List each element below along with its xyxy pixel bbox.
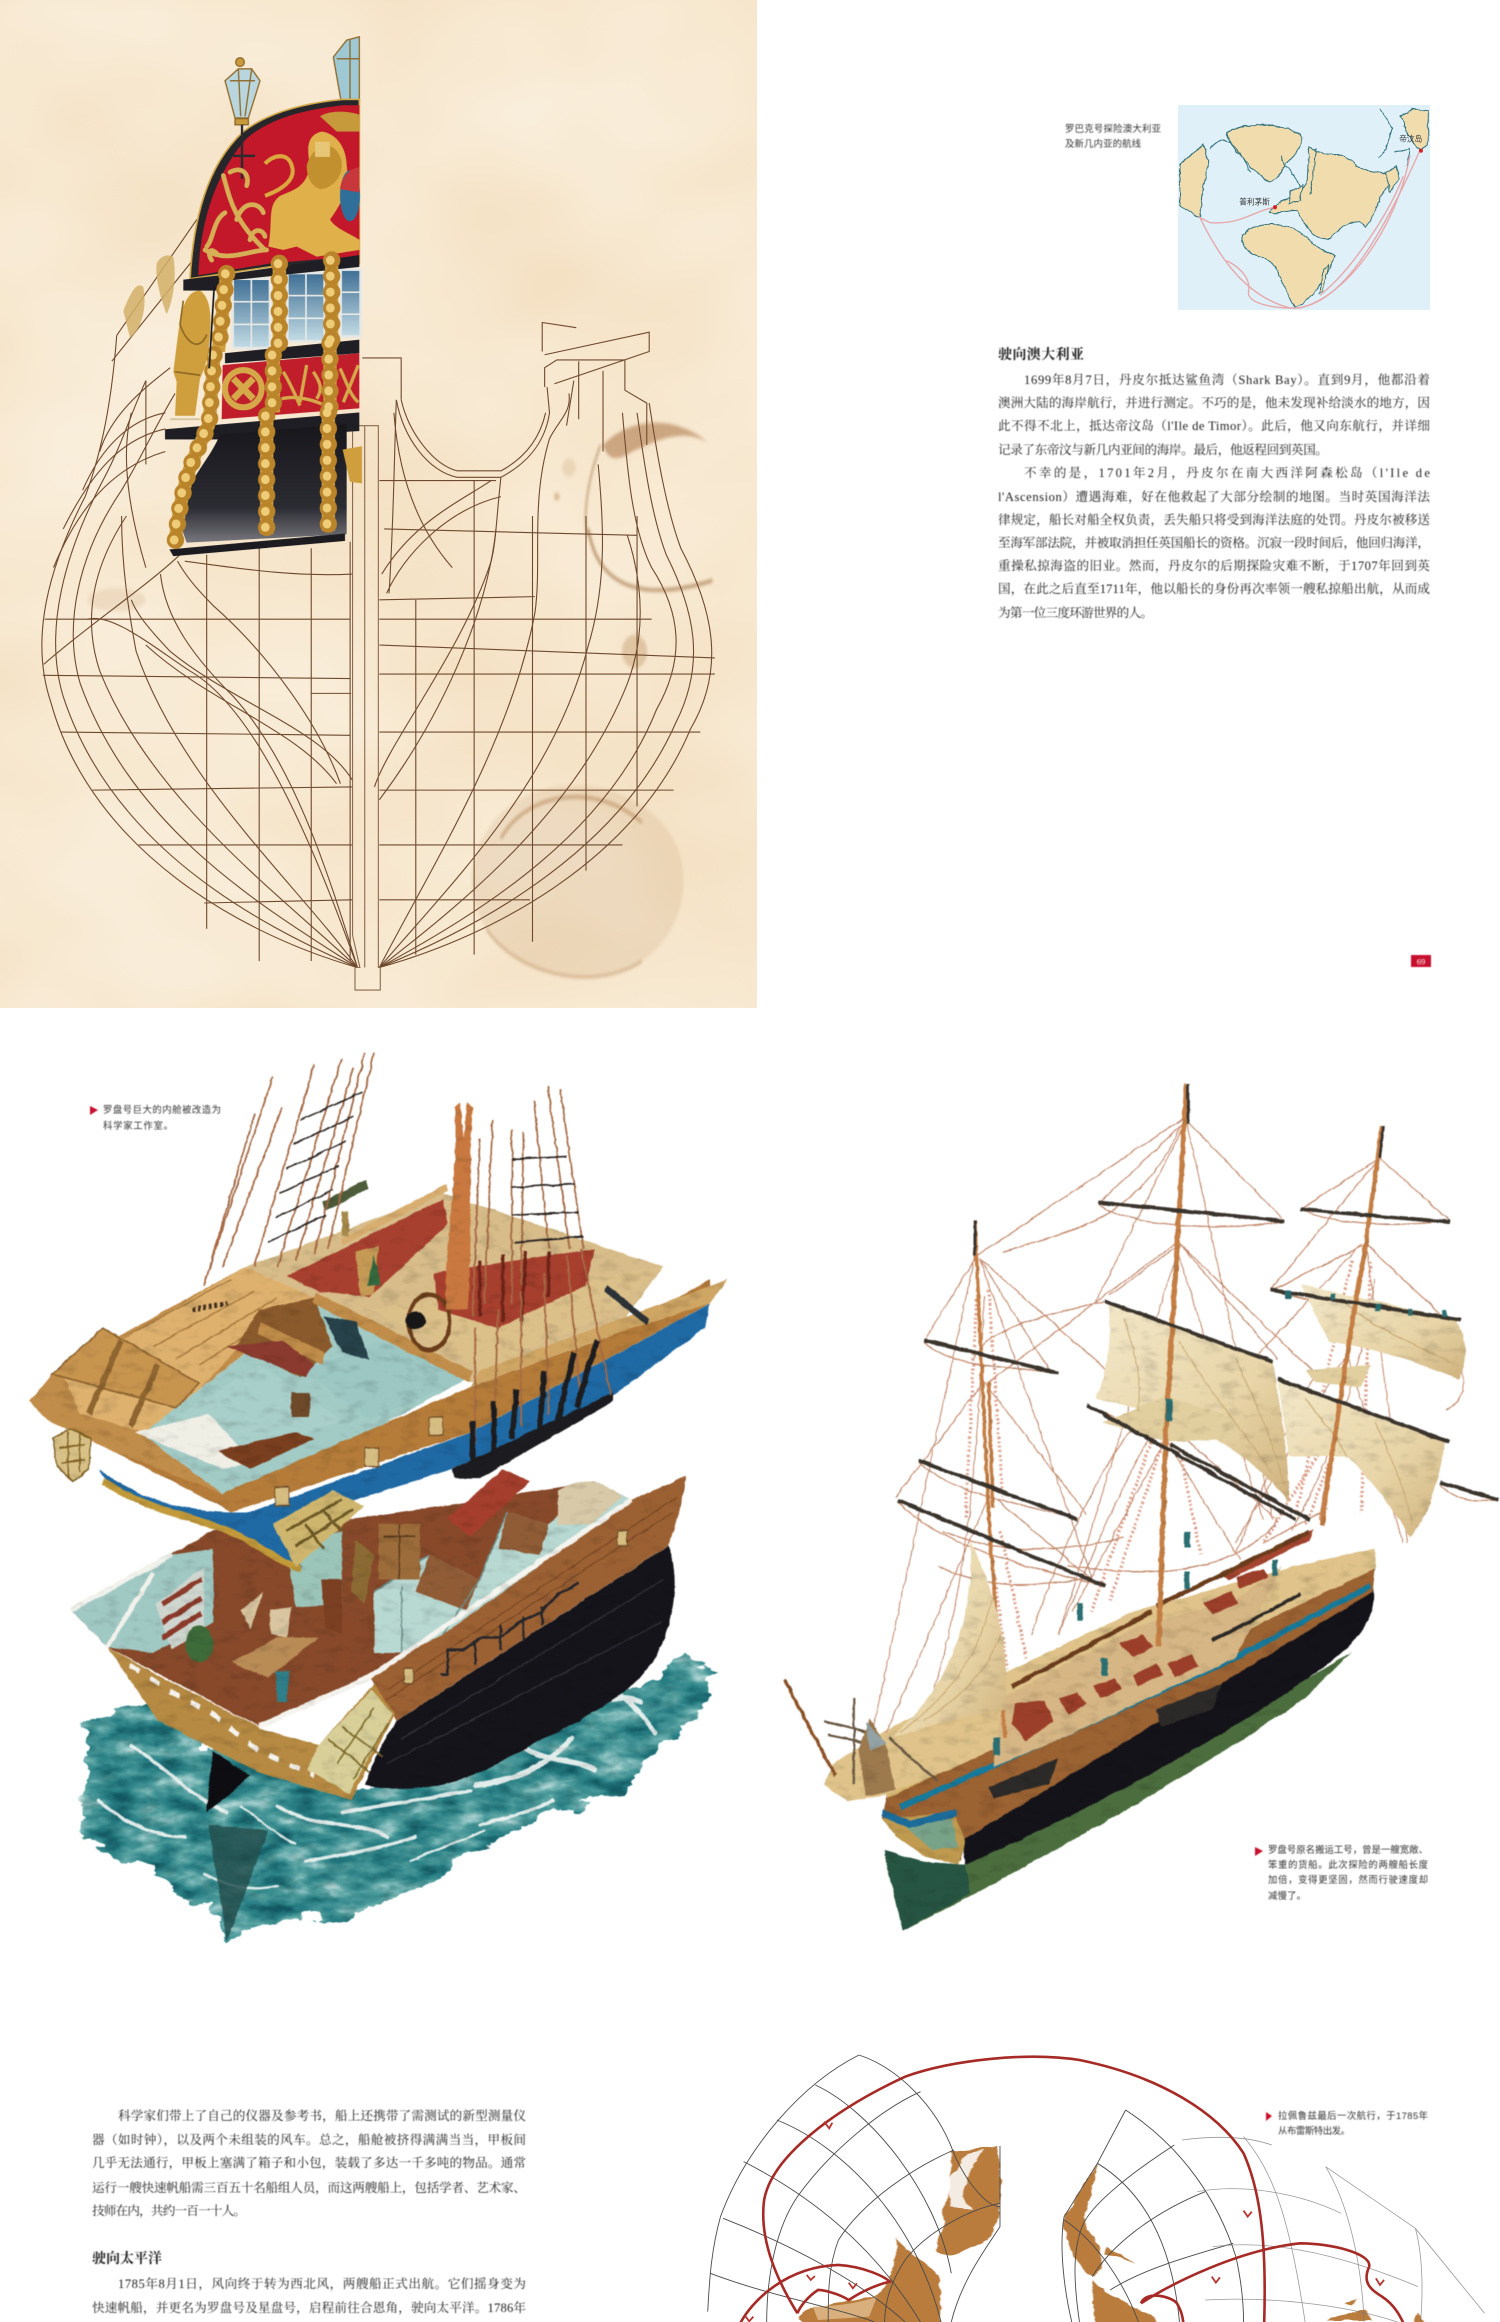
callout: ship note: 罗盘号原名搬运工号，曾是一艘宽敞、	[1268, 1844, 1428, 1855]
masts	[975, 1083, 1382, 1738]
text block: sailing to Australia	[998, 346, 1430, 620]
illustration: full rigged ship	[784, 1083, 1499, 1931]
callout: cabin note	[90, 1104, 221, 1131]
hull timber band	[882, 1569, 1375, 1862]
paragraph: 为第一位三度环游世界的人。	[998, 605, 1153, 620]
mast	[445, 1101, 473, 1310]
paragraph: 至海军部法院，并被取消担任英国船长的资格。沉寂一段时间后，他回归海洋，	[998, 535, 1430, 551]
stern frame and top deck	[29, 1267, 314, 1494]
upper interior base	[140, 1297, 471, 1506]
stern lantern	[52, 1429, 91, 1481]
deck hatches and crates	[1012, 1569, 1268, 1741]
hull wireframe lines	[42, 219, 715, 990]
map: voyage of the Roebuck	[1065, 105, 1430, 310]
lower dark counter	[180, 424, 347, 543]
chainplates	[989, 1684, 1222, 1798]
lower gallery railing	[107, 1647, 395, 1800]
masts over sails	[1159, 1244, 1177, 1646]
map caption: 罗巴克号探险澳大利亚	[1065, 123, 1161, 134]
illustration: cutaway ship in waves	[29, 1052, 728, 1941]
table and figures	[232, 1638, 319, 1678]
paragraph	[92, 2108, 526, 2219]
upper cabins	[172, 1365, 342, 1463]
callout: route note: 从布雷斯特出发。	[1278, 2125, 1350, 2136]
deck cannon	[606, 1288, 648, 1322]
paragraph: 快速帆船，并更名为罗盘号及星盘号，启程前往合恩角，驶向太平洋。1786年	[92, 2300, 526, 2316]
icon: right lantern	[333, 37, 359, 104]
route lines	[738, 2057, 1405, 2322]
paragraph: 1785年8月1日，风向终于转为西北风，两艘船正式出航。它们摇身变为	[118, 2276, 526, 2292]
callout: ship note: 笨重的货船。此次探险的两艘船长度	[1268, 1859, 1428, 1870]
lower interior floor	[71, 1481, 632, 1727]
paragraph: 1699年8月7日，丹皮尔抵达鲨鱼湾（Shark Bay）。直到9月，他都沿着	[1024, 372, 1430, 388]
red hatches	[287, 1199, 448, 1297]
callout: ship note: 加倍，变得更坚固，然而行驶速度却	[1268, 1874, 1428, 1885]
gold pillars	[174, 260, 332, 544]
paragraph: 澳洲大陆的海岸航行，并进行测定。不巧的是，他未发现补给淡水的地方，因	[998, 395, 1430, 411]
lower hull black	[365, 1546, 675, 1789]
lower hull planking	[369, 1475, 687, 1720]
callout: cabin note: 罗盘号巨大的内舱被改造为	[103, 1104, 221, 1115]
paragraph: 此不得不北上，抵达帝汶岛（l'Ile de Timor）。此后，他又向东航行，并详细	[998, 418, 1430, 434]
waves	[84, 1653, 714, 1941]
rudder below water	[209, 1825, 268, 1941]
map caption	[1065, 123, 1161, 149]
carved red frieze	[222, 353, 359, 419]
paragraph: 国，在此之后直至1711年，他以船长的身份再次率领一艘私掠船出航，从而成	[998, 581, 1430, 597]
page number: 69	[1417, 956, 1425, 966]
stern upper red panel	[190, 99, 359, 279]
paragraph: 器（如时钟），以及两个未组装的风车。总之，船舱被挤得满满当当，甲板间	[92, 2132, 526, 2148]
ornament: hanging mask	[343, 446, 362, 483]
lower library room	[71, 1549, 213, 1653]
coffee stains	[88, 423, 712, 977]
lower cabins	[374, 1481, 632, 1653]
black bars	[165, 255, 359, 439]
grid lines	[708, 2055, 1244, 2322]
paragraph: 重操私掠海盗的旧业。然而，丹皮尔的后期探险灾难不断，于1707年回到英	[998, 558, 1430, 574]
landmasses	[797, 2146, 1428, 2322]
paragraph	[998, 372, 1430, 620]
icon: left lantern	[225, 58, 260, 125]
ornament: carved figure	[173, 291, 211, 416]
ornament: royal lion	[265, 112, 360, 257]
windows	[233, 270, 361, 348]
stern painted decoration	[123, 37, 362, 556]
callout: ship note: 减慢了。	[1268, 1890, 1306, 1901]
text block: scientists and the Pacific	[92, 2108, 526, 2316]
heading: 驶向澳大利亚	[998, 346, 1084, 363]
black hull	[961, 1586, 1374, 1865]
yards	[898, 1203, 1499, 1586]
panel: hull construction plan on parchment	[0, 0, 757, 1008]
side ports	[275, 1417, 627, 1684]
map labels	[1239, 134, 1422, 207]
map: La Perouse route	[708, 2055, 1485, 2322]
callout: cabin note: 科学家工作室。	[103, 1120, 173, 1131]
deck	[824, 1548, 1375, 1801]
paragraph: 不幸的是，1701年2月，丹皮尔在南大西洋阿森松岛（l'Ile de	[1024, 465, 1430, 481]
paragraph: 律规定，船长对船全权负责，丢失船只将受到海洋法庭的处罚。丹皮尔被移送	[998, 512, 1430, 528]
bow spar and bowsprit	[784, 1680, 835, 1776]
stern gallery	[882, 1813, 966, 1865]
crew on rigging	[993, 1290, 1447, 1755]
paragraph: 技师在内，共约一百一十人。	[92, 2203, 246, 2219]
sails	[891, 1540, 1007, 1738]
ornament: gold foliage	[205, 170, 267, 260]
callout: route note	[1266, 2110, 1428, 2136]
paragraph: 记录了东帝汶与新几内亚间的海岸。最后，他返程回到英国。	[998, 442, 1328, 458]
upper lattice window	[273, 1491, 365, 1567]
deadeyes	[473, 1340, 597, 1463]
map labels: 普利茅斯	[1239, 196, 1270, 207]
paragraph: 几乎无法通行，甲板上塞满了箱子和小包，装载了多达一千多吨的物品。通常	[92, 2155, 526, 2171]
wheel	[409, 1294, 450, 1350]
rear deck base	[245, 1193, 664, 1383]
upper deck	[369, 1267, 664, 1371]
callout: ship note	[1255, 1844, 1428, 1901]
paragraph: l'Ascension）遭遇海难，好在他救起了大部分绘制的地图。当时英国海洋法	[998, 489, 1430, 505]
callout: route note: 拉佩鲁兹最后一次航行，于1785年	[1278, 2110, 1428, 2121]
paragraph	[92, 2276, 526, 2316]
underwater hull	[884, 1652, 1352, 1931]
map land and routes	[1180, 109, 1428, 308]
rigging	[204, 1052, 611, 1445]
upper hull wood side	[34, 1279, 710, 1512]
map sea	[1178, 105, 1430, 310]
map caption: 及新几内亚的航线	[1065, 138, 1142, 149]
route arrows	[745, 2122, 1384, 2321]
rigging	[872, 1117, 1499, 1732]
parchment background	[0, 0, 757, 1008]
black channel platform	[452, 1392, 613, 1478]
paragraph: 运行一艘快速帆船需三百五十名船组人员，而这两艘船上，包括学者、艺术家、	[92, 2180, 526, 2196]
page number	[1411, 955, 1431, 967]
upper hull blue band	[98, 1304, 710, 1567]
heading: 驶向太平洋	[92, 2250, 162, 2267]
map labels: 帝汶岛	[1399, 134, 1422, 144]
telescope	[323, 1184, 367, 1207]
paragraph: 科学家们带上了自己的仪器及参考书，船上还携带了需测试的新型测量仪	[118, 2108, 526, 2124]
